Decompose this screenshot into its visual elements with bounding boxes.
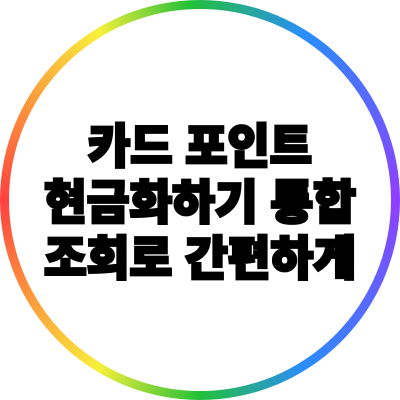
title line 1: 카드 포인트: [88, 120, 312, 173]
title line 3: 조회로 간편하게: [44, 232, 356, 285]
title line 2: 현금화하기 통합: [44, 176, 356, 229]
